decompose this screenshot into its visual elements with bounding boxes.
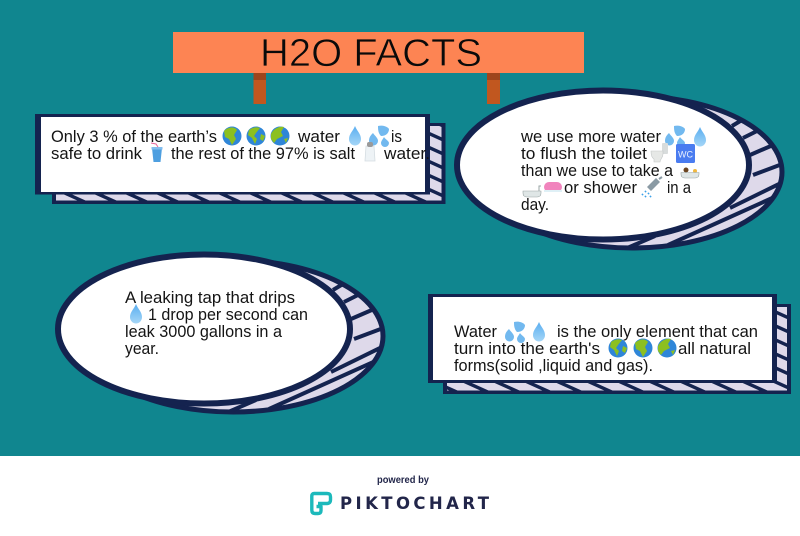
- icon: globe: [658, 338, 676, 358]
- ellipse front: [58, 254, 350, 404]
- icon: globe: [608, 338, 628, 358]
- brand name: PIKTOCHART: [340, 494, 490, 513]
- icon: bathtub: [523, 186, 541, 197]
- fact text: Water: [454, 323, 497, 341]
- fact text: we use more water: [520, 128, 662, 146]
- fact text: is the only element that can: [557, 323, 758, 341]
- panel: top left fact card: [35, 114, 446, 204]
- icon: toilet: [651, 143, 668, 162]
- icon: shower: [642, 177, 662, 197]
- icon: water drop: [694, 127, 706, 146]
- footer: [0, 456, 800, 536]
- icon: globe: [246, 126, 266, 146]
- striped card shadow: [52, 123, 446, 204]
- fact text: [520, 128, 692, 214]
- icon: globe: [634, 338, 652, 358]
- panel: top right fact ellipse: [457, 90, 790, 252]
- banner bar: [173, 32, 584, 73]
- panel: lower right fact card: [428, 294, 791, 394]
- banner post right: [487, 73, 500, 104]
- fact text: 1 drop per second can: [148, 306, 308, 324]
- fact text: A leaking tap that drips: [125, 289, 295, 307]
- fact text: Only 3 % of the earth’s: [51, 128, 217, 146]
- fact text: forms(solid ,liquid and gas).: [454, 357, 653, 375]
- icon: globe: [222, 126, 242, 146]
- icon: globe: [270, 126, 290, 146]
- panel: lower left fact ellipse: [58, 254, 391, 416]
- icon: water drop: [533, 322, 545, 342]
- title: H2O FACTS: [260, 32, 482, 75]
- icon: cup: [151, 143, 162, 162]
- card front: [35, 114, 430, 194]
- icon: soap: [544, 182, 562, 192]
- fact text: is: [391, 128, 402, 146]
- ellipse front: [457, 90, 749, 240]
- icon: splash: [369, 126, 389, 147]
- banner post left: [254, 73, 266, 104]
- fact text: day.: [521, 196, 549, 214]
- fact text: to flush the toilet: [521, 145, 647, 163]
- fact text: water: [297, 128, 341, 146]
- fact text: [51, 128, 430, 163]
- icon: water drop: [349, 126, 361, 146]
- icon: wc sign: [676, 144, 695, 163]
- icon: salt shaker: [365, 142, 375, 161]
- striped card shadow: [443, 304, 791, 394]
- striped ellipse shadow: [143, 260, 386, 414]
- powered by label: powered by: [377, 475, 429, 486]
- fact text: turn into the earth's: [454, 340, 600, 358]
- fact text: leak 3000 gallons in a: [125, 323, 283, 341]
- fact text: [454, 323, 758, 375]
- title banner: [173, 32, 584, 104]
- fact text: than we use to take a: [521, 162, 674, 180]
- icon: wc sign: WC: [678, 150, 693, 160]
- fact text: in a: [667, 179, 692, 197]
- icon: water drop: [130, 304, 142, 324]
- icon: splash: [505, 322, 525, 343]
- fact text: all natural: [678, 340, 751, 358]
- fact text: or shower: [564, 179, 638, 197]
- card front: [428, 294, 777, 383]
- fact text: safe to drink: [51, 145, 143, 163]
- striped ellipse shadow: [544, 96, 784, 250]
- icon: splash: [665, 126, 685, 147]
- fact text: year.: [125, 340, 159, 358]
- icon: person in bath: [681, 168, 699, 178]
- icon: piktochart logo: [312, 494, 330, 514]
- fact text: the rest of the 97% is salt: [171, 145, 355, 163]
- fact text: [125, 289, 308, 358]
- fact text: water.: [383, 145, 430, 163]
